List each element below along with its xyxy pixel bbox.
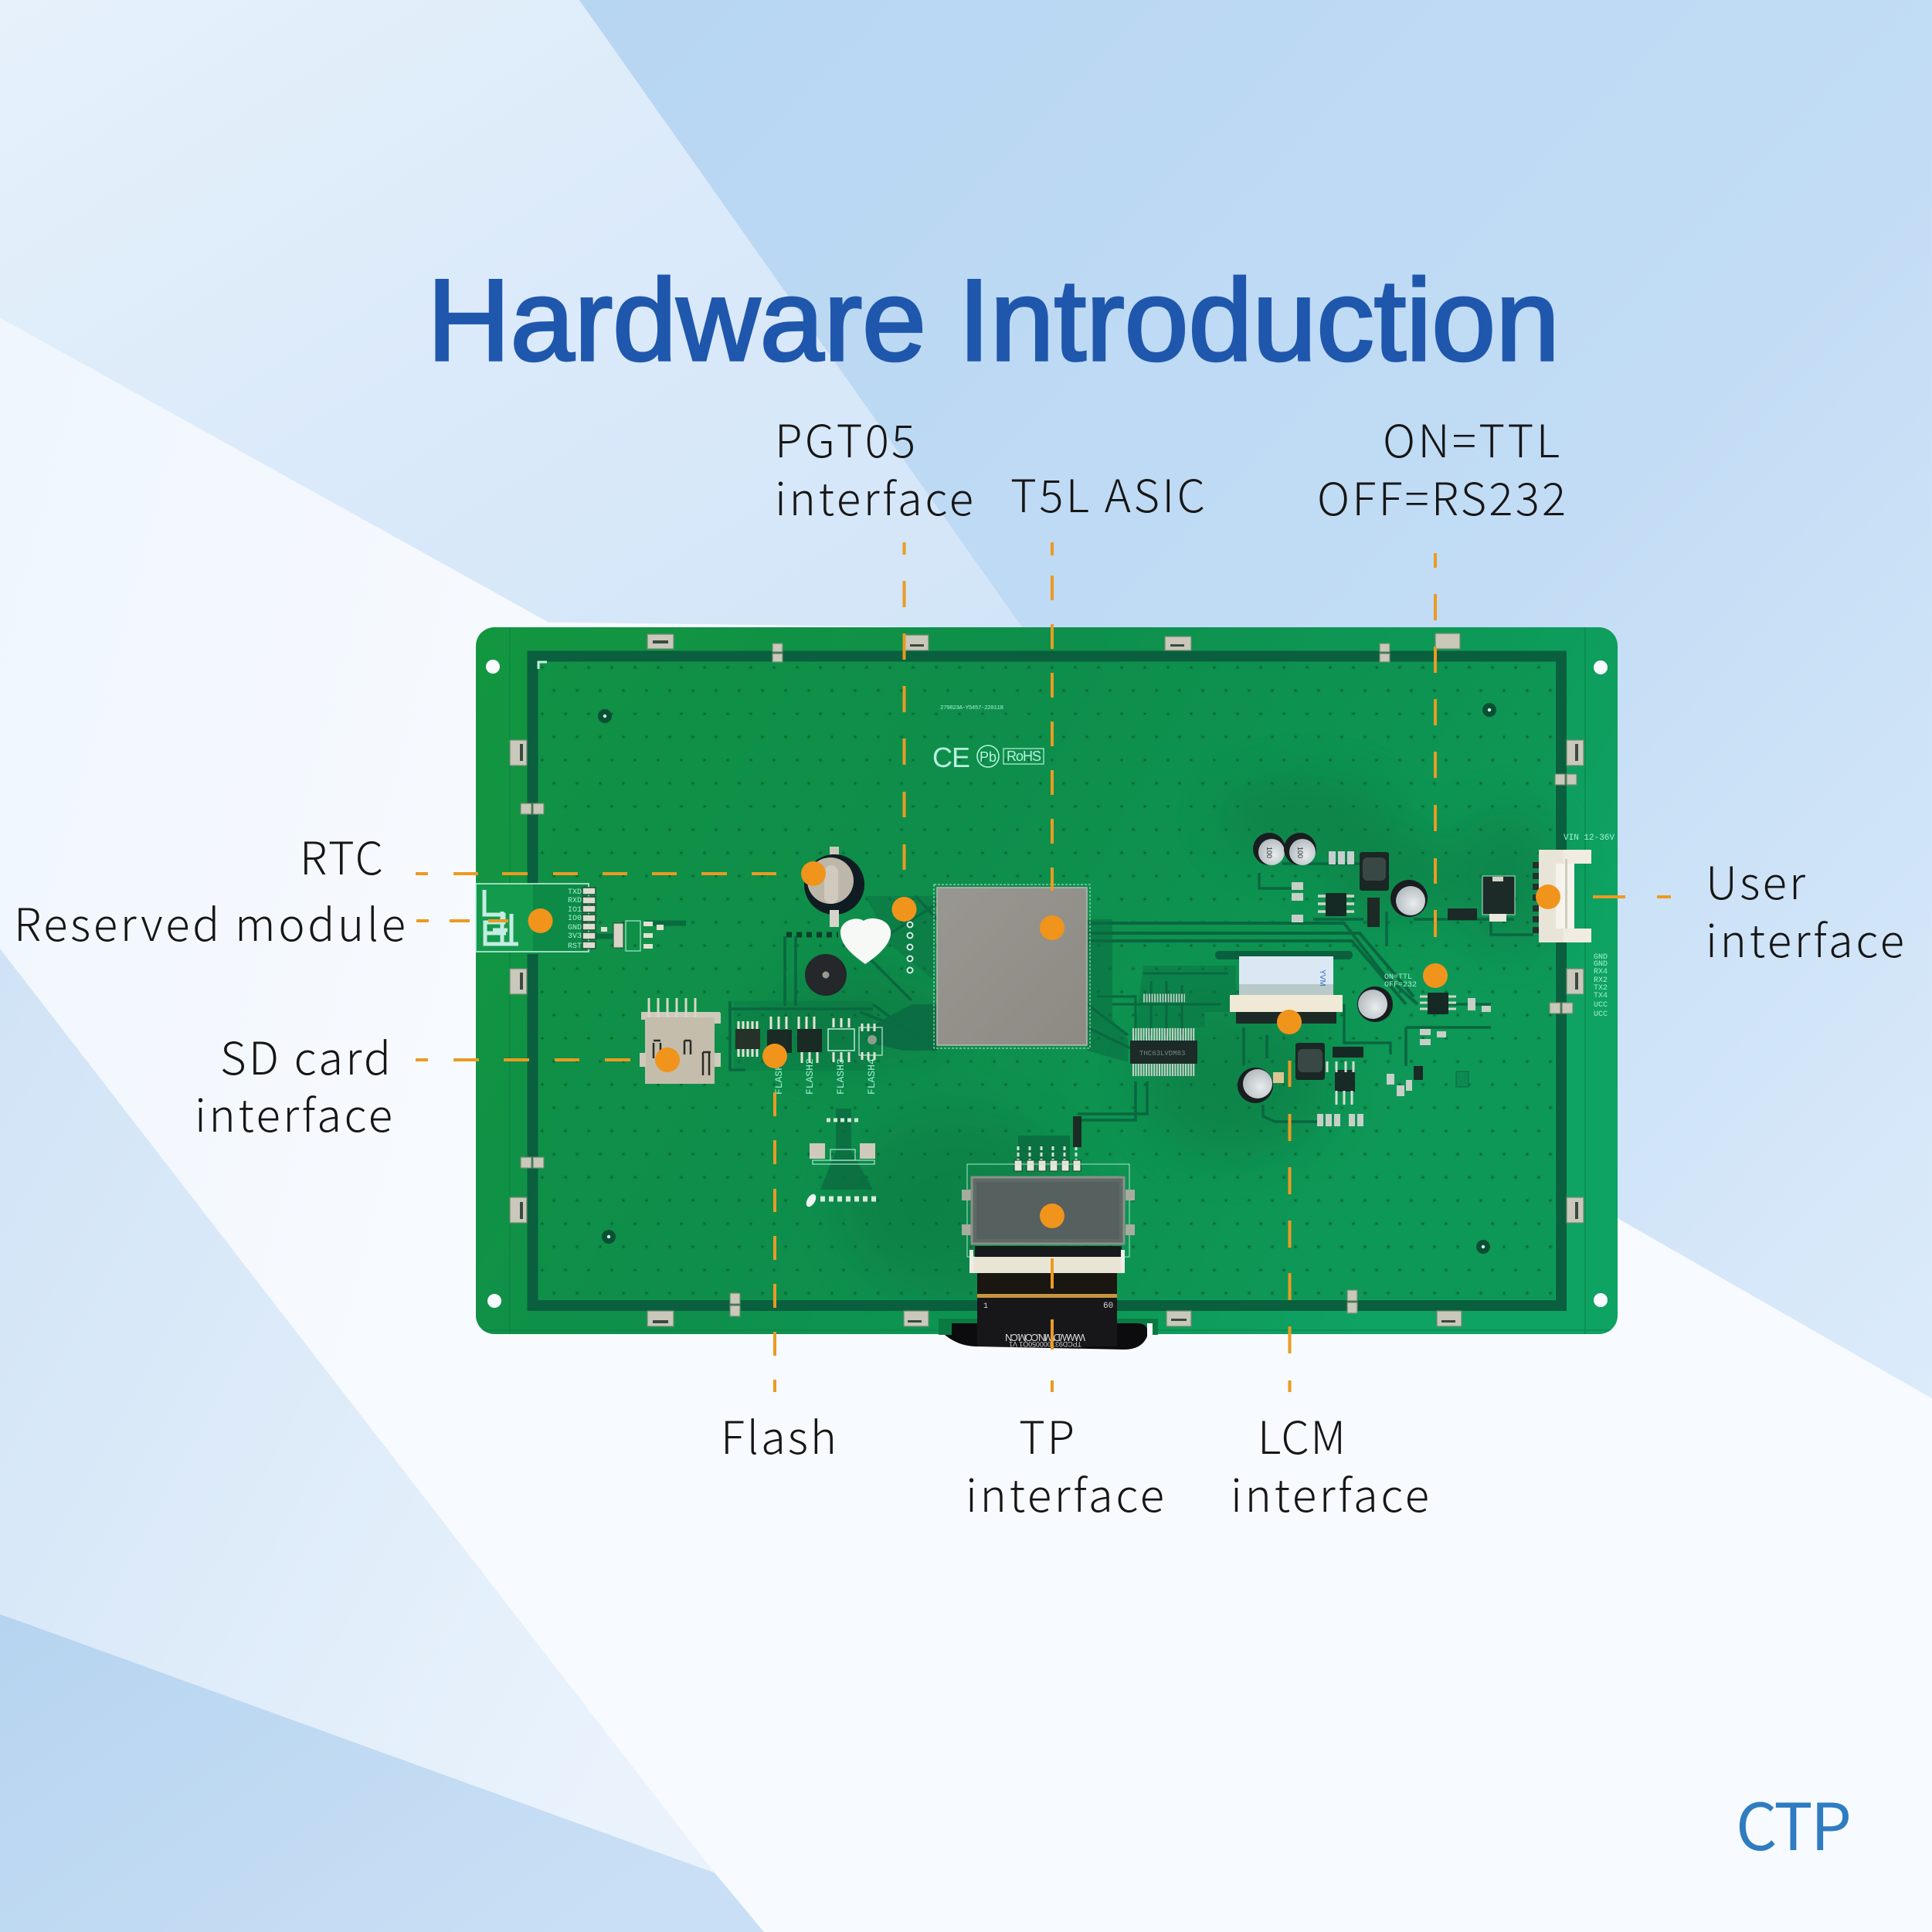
leader: T5L ASIC (1051, 542, 1054, 891)
silkscreen: power label and UART pins: UCC (1594, 1010, 1608, 1019)
mounting holes (486, 660, 1608, 1308)
label: TP interface: TP (1019, 1402, 1075, 1467)
reserved module antenna area: RXD (568, 897, 582, 905)
capacitors 100 16V: 100 (1265, 847, 1273, 858)
label: SD card interface (195, 1023, 392, 1145)
component: flash chips: FLASH1 (773, 1058, 785, 1095)
corner mark (538, 662, 547, 669)
component: LVDS IC: THC63LVDM83 (1139, 1050, 1185, 1058)
board marks: CE, Pb-free, RoHS: C (932, 742, 952, 773)
label: ON=TTL OFF=RS232: OFF=RS232 (1317, 463, 1566, 528)
leader: Flash (773, 1092, 776, 1392)
reserved module antenna area: IO0 (568, 915, 582, 923)
component: TP connector with cable (939, 1116, 1158, 1350)
label: LCM interface: interface (1231, 1460, 1429, 1525)
silkscreen: power label and UART pins: TX4 (1594, 992, 1608, 1000)
reserved module antenna area: 3V3 (568, 932, 582, 941)
label: T5L ASIC: T5L ASIC (1010, 460, 1205, 525)
board marks: CE, Pb-free, RoHS: 279823A-Y5457-220118 (940, 705, 1003, 711)
board outer edge band (476, 627, 1618, 1334)
label: TP interface: interface (966, 1460, 1164, 1525)
reserved module antenna area: IO1 (568, 906, 582, 915)
silkscreen: power label and UART pins: GND (1594, 953, 1608, 962)
label: TP interface (966, 1402, 1164, 1525)
silkscreen: power label and UART pins: RX2 (1594, 976, 1608, 985)
component: T5L ASIC chip (934, 885, 1090, 1048)
component: lower flash connector (804, 1109, 877, 1208)
board marks: CE, Pb-free, RoHS: Pb (980, 749, 997, 765)
reserved module antenna area: RST (568, 942, 582, 951)
component: white heart-shaped glue (840, 918, 891, 964)
board marks: CE, Pb-free, RoHS (932, 705, 1044, 773)
soft component shadows (772, 780, 1560, 1298)
board marks: CE, Pb-free, RoHS: RoHS (1007, 749, 1041, 764)
component: TP connector with cable: TPCD93T000050Q1 V1 (1009, 1340, 1081, 1348)
component: SD card slot (640, 998, 721, 1084)
label: RTC: RTC (300, 823, 383, 888)
dark frame trace (533, 657, 1561, 1306)
copper area (1208, 693, 1555, 1299)
leader: User interface (1593, 895, 1671, 898)
component: LCM connector and ribbon: YVM (1318, 969, 1326, 986)
component: pin header holes (907, 922, 913, 973)
leader: PGT05 (902, 542, 905, 870)
leader: Reserved module (416, 919, 508, 922)
label: SD card interface: interface (195, 1080, 392, 1145)
label: CTP: CTP (1736, 1776, 1852, 1869)
label: Reserved module: Reserved module (14, 889, 406, 954)
traces (730, 864, 1533, 1122)
silkscreen: power label and UART pins: VIN 12-36V (1564, 834, 1615, 843)
trace fan: copper pours around T5L (734, 896, 1236, 1071)
label: PGT05 interface: PGT05 (775, 406, 915, 470)
label: PGT05 interface (775, 406, 973, 528)
reserved module antenna area: GND (568, 924, 582, 932)
component: RTC coin cell (804, 847, 864, 927)
label: Flash: Flash (721, 1402, 837, 1467)
board brightness gradient (1117, 661, 1555, 1299)
title: Hardware Introduction (427, 255, 1560, 385)
board marks: CE, Pb-free, RoHS: E (952, 742, 970, 773)
silkscreen: power label and UART pins: GND (1594, 960, 1608, 969)
edge tabs and pads (510, 633, 1584, 1326)
leader: SD card (416, 1058, 630, 1061)
resistor row (786, 932, 838, 938)
component: flash chips (735, 1017, 882, 1095)
label: User interface: User (1706, 847, 1805, 912)
silkscreen: power label and UART pins (1384, 834, 1615, 1019)
component: flash chips: FLASH3 (835, 1058, 847, 1095)
dashed leader lines (416, 542, 1671, 1392)
component: user interface connector (1533, 850, 1591, 942)
label: ON=TTL OFF=RS232 (1317, 406, 1566, 528)
silkscreen: power label and UART pins: OFF=232 (1384, 981, 1417, 990)
leader: ON=TTL (1434, 553, 1437, 937)
label: PGT05 interface: interface (775, 463, 973, 528)
silkscreen: power label and UART pins: TX2 (1594, 984, 1608, 993)
reserved module antenna area (476, 884, 686, 952)
fiducials (598, 703, 1496, 1254)
label: User interface: interface (1706, 905, 1904, 970)
board substrate (476, 627, 1618, 1334)
component: TP connector with cable: 1 (983, 1302, 988, 1311)
label: SD card interface: SD card (220, 1023, 391, 1088)
label: LCM interface: LCM (1258, 1402, 1346, 1467)
leader: LCM (1289, 1061, 1292, 1392)
label: User interface (1706, 847, 1904, 970)
component: flash chips: FLASH2 (804, 1058, 816, 1095)
component: flash chips: FLASH4 (866, 1058, 878, 1095)
capacitors 100 16V: 100 (1296, 847, 1304, 858)
label: LCM interface (1231, 1402, 1429, 1525)
leader: TP (1051, 1258, 1054, 1392)
capacitors 100 16V (1253, 833, 1316, 865)
silkscreen: power label and UART pins: ON=TTL (1384, 973, 1412, 982)
label: ON=TTL OFF=RS232: ON=TTL (1383, 406, 1560, 470)
component: LVDS IC (1130, 998, 1197, 1070)
component: buzzer (805, 954, 847, 996)
silkscreen: power label and UART pins: RX4 (1594, 968, 1608, 976)
component: capacitors and inductors (1238, 833, 1515, 1126)
reserved module antenna area: TXD (568, 888, 582, 897)
marker dots (528, 861, 1560, 1228)
component: TP connector with cable: WWW.DWIN.COM.CN (1005, 1332, 1085, 1343)
component: LCM connector and ribbon (1215, 951, 1353, 1024)
panel: circuit board (476, 627, 1618, 1350)
via grid (538, 661, 1555, 1299)
leader: RTC (416, 872, 776, 875)
component: TP connector with cable: 60 (1103, 1302, 1113, 1311)
silkscreen: power label and UART pins: UCC (1594, 1001, 1608, 1010)
